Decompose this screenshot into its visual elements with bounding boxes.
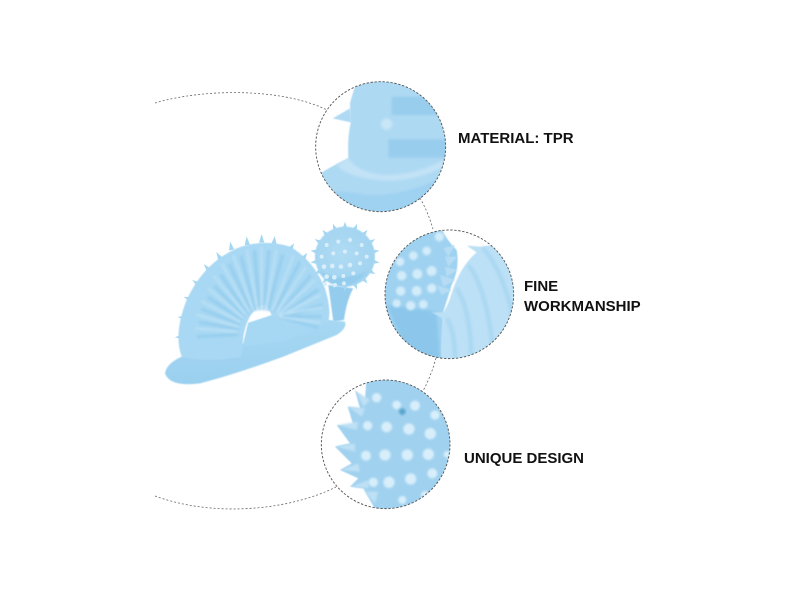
toy stem: [328, 285, 353, 322]
material: upper groove: [391, 96, 438, 116]
design: nubs: [361, 393, 450, 504]
arch spikes: [174, 234, 309, 340]
label: unique design: UNIQUE DESIGN: [464, 450, 584, 467]
dashed connector: lower arc: [155, 487, 336, 509]
ball spikes: [310, 222, 380, 292]
base top surface: [243, 317, 327, 347]
design: spiky ball: [334, 380, 450, 509]
toy arch: [178, 243, 329, 360]
label: fine workmanship: WORKMANSHIP: [524, 298, 641, 315]
material: lower groove: [388, 139, 448, 158]
detail circle: workmanship: [384, 230, 514, 360]
toy spiky ball: [310, 222, 380, 292]
ball nubs: [320, 238, 369, 287]
arch light ribs: [195, 247, 323, 332]
dashed connector: upper arc: [155, 93, 329, 111]
material: spike: [333, 108, 352, 123]
label: material: MATERIAL: TPR: [458, 130, 574, 147]
material: nub: [381, 118, 392, 130]
material: toy body: [322, 82, 446, 212]
workmanship: nubs: [393, 232, 444, 310]
workmanship: ribbed body: [432, 245, 514, 358]
dashed connector: circle one to circle two: [420, 198, 433, 229]
material: shadow bottom: [335, 180, 436, 212]
dashed connector: circle two to circle three: [420, 358, 436, 396]
detail circle: unique design: [320, 380, 450, 510]
detail circle: material: [315, 81, 446, 212]
label: fine workmanship: FINE: [524, 278, 558, 295]
design: spike highlights: [336, 392, 378, 503]
design: dark spot: [399, 408, 406, 415]
arch grooves: [197, 250, 322, 337]
product: blue snail-shaped toy: [165, 222, 380, 384]
ball shading: [318, 270, 367, 286]
workmanship: rib shading: [447, 248, 513, 358]
workmanship: ball spikes: [437, 245, 457, 295]
hole: [249, 305, 270, 322]
workmanship: ball: [385, 230, 458, 358]
toy base: [165, 315, 345, 384]
